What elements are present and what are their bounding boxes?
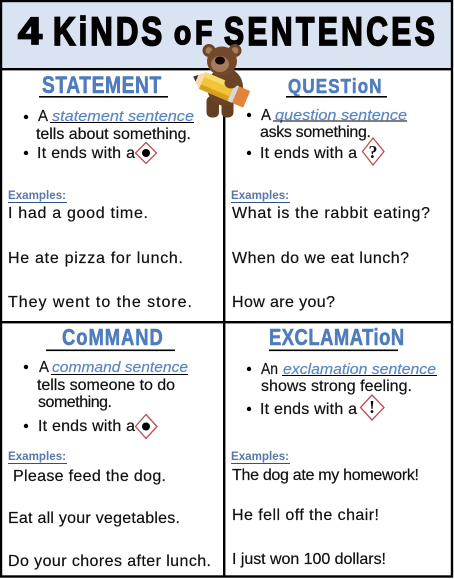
panel: question: How are you? xyxy=(232,294,335,311)
icon: question mark diamond: ? xyxy=(368,142,378,162)
panel: question: What is the rabbit eating? xyxy=(232,205,430,222)
panel: command: Examples: xyxy=(8,451,66,463)
panel: exclamation: The dog ate my homework! xyxy=(232,467,419,484)
icon: exclamation diamond xyxy=(360,395,384,420)
icon: question mark diamond xyxy=(362,138,384,165)
panel: question: asks something. xyxy=(260,124,371,141)
bear body xyxy=(207,68,243,106)
title: 4 xyxy=(18,11,42,53)
panel: command: Do your chores after lunch. xyxy=(8,553,211,570)
panel: question xyxy=(231,75,430,311)
panel: exclamation: An xyxy=(261,361,278,378)
panel: statement xyxy=(8,71,194,311)
panel: exclamation: exclamation sentence xyxy=(283,361,436,378)
icon: period diamond xyxy=(136,142,156,164)
panel: command: It ends with a xyxy=(38,418,135,435)
title: SENTENCES xyxy=(224,10,435,54)
title: oF xyxy=(174,15,212,52)
panel: statement: Examples: xyxy=(8,190,66,202)
icon: bear holding pencil xyxy=(190,44,250,118)
panel: statement: tells about something. xyxy=(36,126,191,143)
panel: exclamation xyxy=(231,325,437,568)
bear legs xyxy=(206,96,219,118)
panel: question: A xyxy=(261,107,271,124)
panel: statement: It ends with a xyxy=(37,145,135,162)
panel: question: When do we eat lunch? xyxy=(232,250,409,267)
bear ears xyxy=(202,44,216,57)
panel: command: A xyxy=(39,359,49,376)
panel: exclamation: He fell off the chair! xyxy=(232,507,379,524)
heading: question: QUESTioN xyxy=(288,75,382,97)
bear head xyxy=(207,46,237,76)
panel: question: Examples: xyxy=(231,190,289,202)
panel: command xyxy=(8,325,211,570)
pencil xyxy=(190,68,250,108)
panel: statement: They went to the store. xyxy=(8,294,192,311)
icon: period diamond xyxy=(136,414,157,438)
panel: question: It ends with a xyxy=(260,145,357,162)
heading: command: CoMMAND xyxy=(62,325,163,351)
header band xyxy=(2,2,451,69)
icon: exclamation diamond: ! xyxy=(369,397,375,417)
heading: exclamation: EXCLAMATioN xyxy=(269,325,404,351)
panel: statement: statement sentence xyxy=(52,108,194,125)
panel: command: command sentence xyxy=(52,359,188,376)
panel: command: tells someone to do xyxy=(37,377,175,394)
panel: statement: A xyxy=(38,108,48,125)
bear paw xyxy=(224,78,238,88)
panel: command: Eat all your vegetables. xyxy=(8,510,180,527)
panel: exclamation: I just won 100 dollars! xyxy=(232,551,386,568)
panel: command: Please feed the dog. xyxy=(13,468,166,485)
panel: command: something. xyxy=(38,394,112,411)
panel: exclamation: It ends with a xyxy=(260,401,357,418)
panel: question: question sentence xyxy=(275,107,407,124)
panel: statement: He ate pizza for lunch. xyxy=(8,250,183,267)
panel: exclamation: Examples: xyxy=(231,451,289,463)
heading: statement: STATEMENT xyxy=(42,71,162,99)
panel: exclamation: shows strong feeling. xyxy=(261,378,412,395)
panel: statement: I had a good time. xyxy=(8,205,148,222)
title: KiNDS xyxy=(53,9,162,54)
title xyxy=(18,9,435,54)
